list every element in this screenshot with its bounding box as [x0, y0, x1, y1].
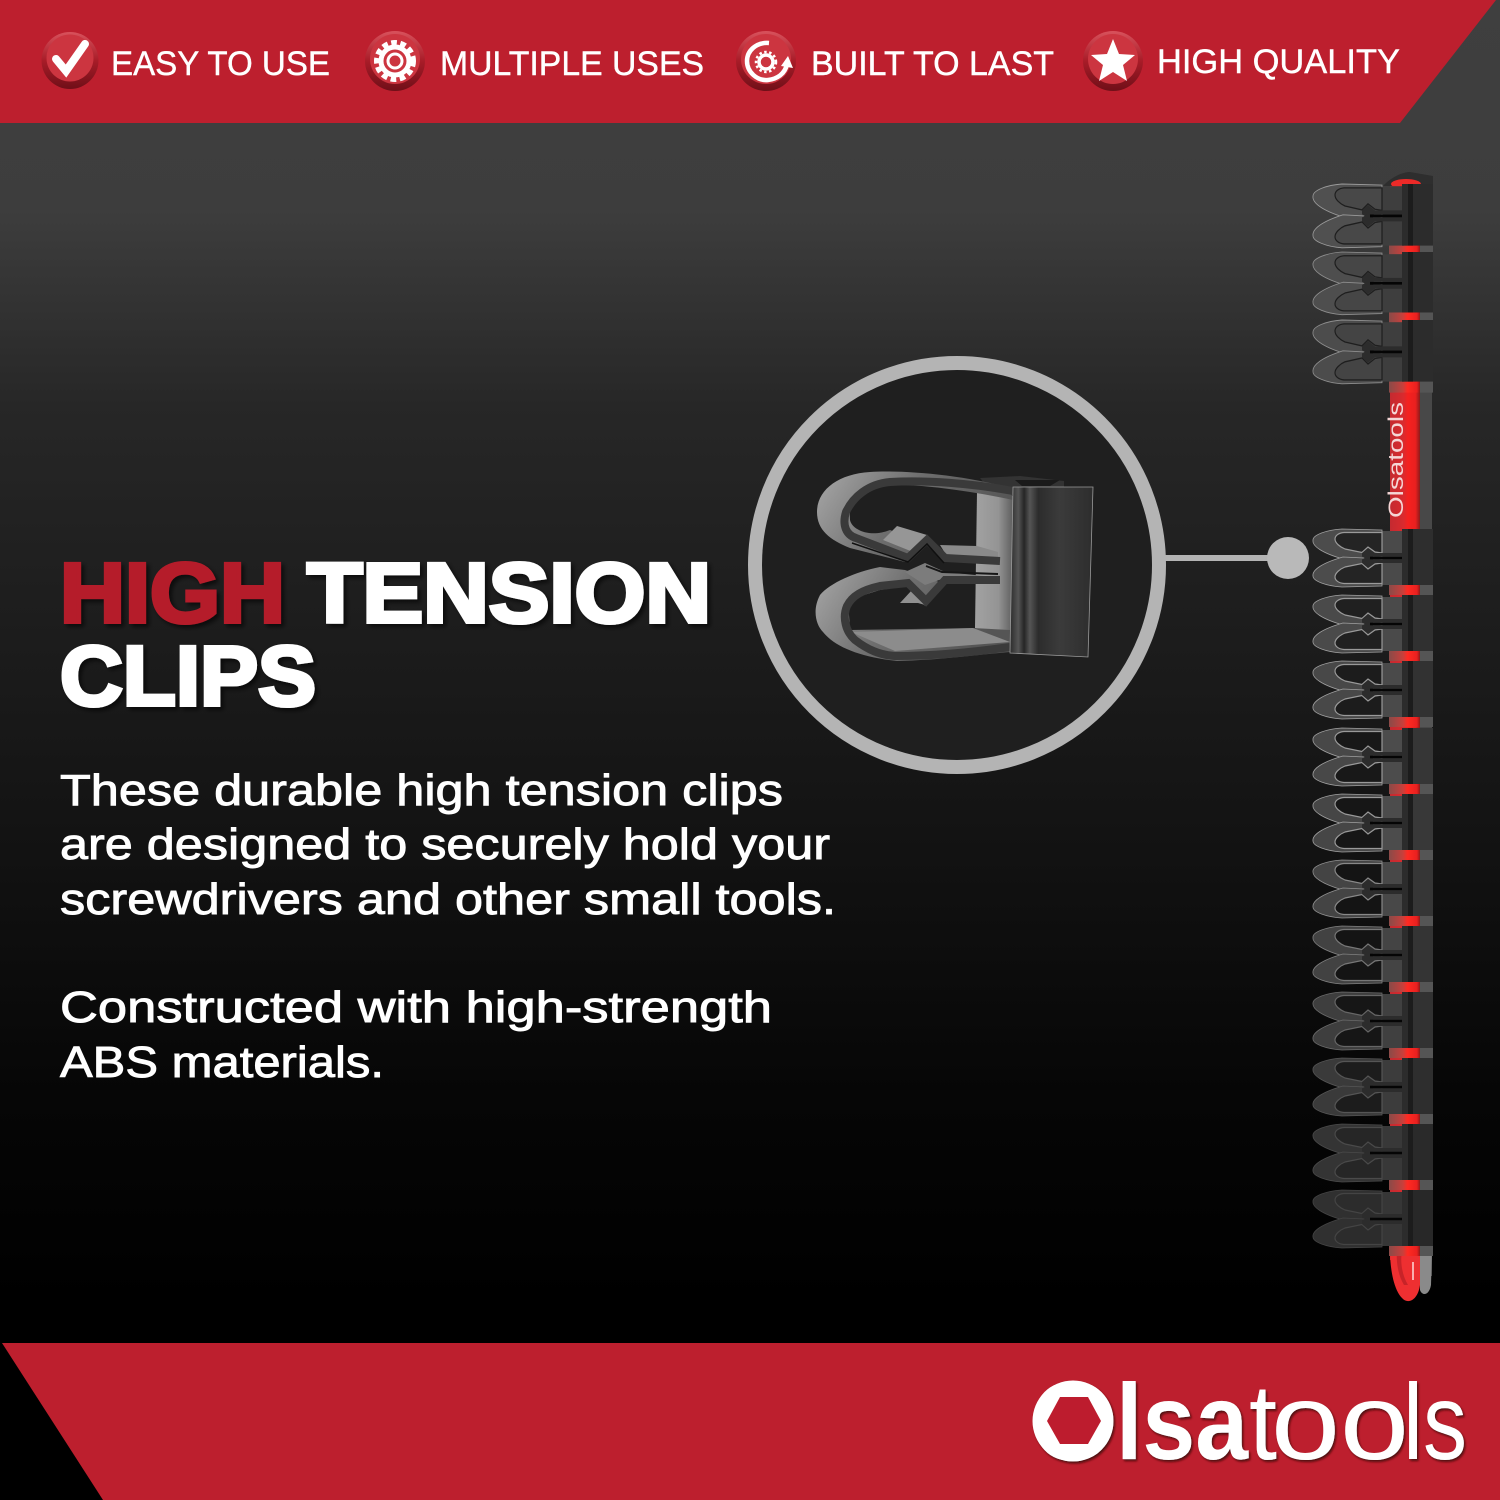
logo: l — [1403, 1361, 1423, 1482]
feature: built to last: BUILT TO LAST — [811, 45, 1054, 83]
top banner — [0, 0, 1496, 123]
callout: magnified clip — [755, 363, 1309, 767]
feature: high quality: HIGH QUALITY — [1157, 43, 1400, 81]
heading: CLIPS — [60, 629, 316, 723]
heading: TENSION — [307, 546, 711, 640]
product: clip rail — [1313, 172, 1433, 1301]
bottom banner — [2, 1343, 1500, 1500]
body text — [60, 766, 836, 1087]
body text: Constructed with high-strength — [60, 983, 772, 1032]
feature: easy to use — [42, 32, 330, 89]
logo: t — [1249, 1361, 1277, 1482]
rail back strip — [1420, 176, 1432, 1276]
body text: These durable high tension clips — [60, 766, 783, 815]
heading — [60, 546, 711, 723]
logo: oo — [1271, 1361, 1409, 1482]
feature: multiple uses — [365, 31, 704, 91]
callout connector line — [1164, 555, 1284, 561]
rail brand text: Olsatools — [1385, 402, 1408, 518]
upper clip group — [1313, 184, 1433, 393]
body text: ABS materials. — [60, 1038, 384, 1087]
heading: HIGH — [60, 546, 285, 640]
feature: built to last — [736, 31, 1054, 91]
lower clip group — [1313, 529, 1433, 1256]
callout ring — [755, 363, 1159, 767]
logo: O — [1030, 1359, 1116, 1484]
feature: easy to use: EASY TO USE — [111, 45, 330, 83]
callout connector dot — [1267, 537, 1309, 579]
logo: lsa — [1116, 1361, 1249, 1482]
body text: are designed to securely hold your — [60, 820, 830, 869]
feature: multiple uses: MULTIPLE USES — [440, 45, 704, 83]
enlarged clip — [816, 472, 1093, 661]
feature: high quality — [1083, 31, 1400, 91]
rail bottom hook — [1390, 1250, 1432, 1301]
rail top cap — [1383, 172, 1433, 189]
logo — [1030, 1359, 1467, 1484]
red rail — [1390, 180, 1420, 1260]
body text: screwdrivers and other small tools. — [60, 875, 836, 924]
logo: s — [1423, 1361, 1467, 1482]
